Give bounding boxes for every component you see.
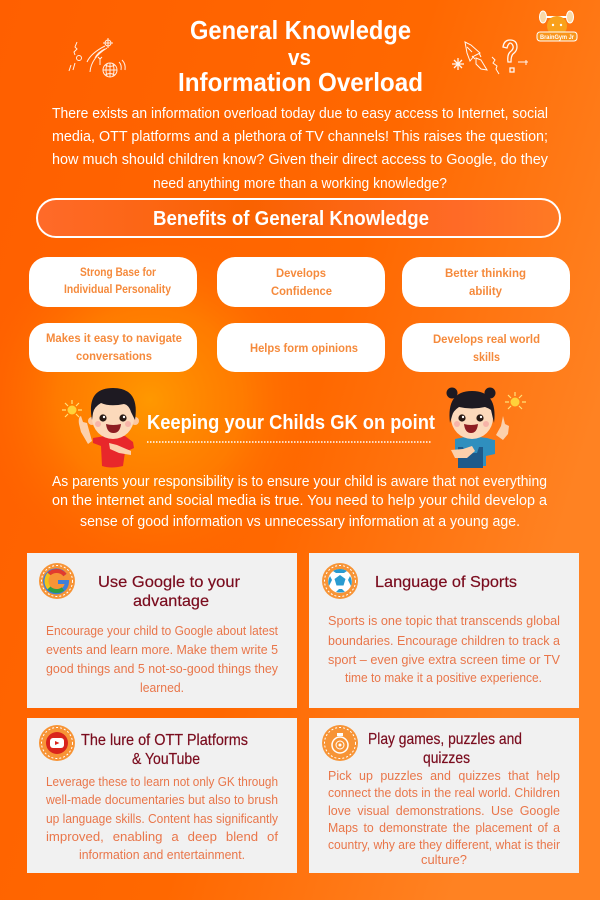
panel: OTT platforms: information and entertainment. xyxy=(79,848,245,862)
panel: use google: events and learn more. Make them write 5 xyxy=(46,643,278,657)
panel: use google xyxy=(27,553,297,708)
icon: google xyxy=(39,563,75,599)
panel: use google: Use Google to your xyxy=(98,574,241,591)
icon: football xyxy=(322,563,358,599)
benefit: better thinking xyxy=(402,257,570,307)
banner: benefits heading: Benefits of General Knowledge xyxy=(153,208,429,230)
icon: rocket and question mark doodle xyxy=(452,40,528,74)
panel: OTT platforms: well-made documentaries but also to brush xyxy=(45,793,278,807)
intro text: media, OTT platforms and a plethora of TV channels! This raises the question; xyxy=(52,129,548,145)
panel: use google: good things and 5 not-so-good things they xyxy=(46,662,279,676)
parents paragraph: sense of good information vs unnecessary information at a young age. xyxy=(80,514,520,530)
intro text: There exists an information overload today due to easy access to Internet, social xyxy=(52,106,548,122)
panel: games and puzzles: love visual demonstrations. Use Google xyxy=(328,804,560,818)
benefit: conversations xyxy=(29,323,197,372)
benefit: opinions: Helps form opinions xyxy=(250,341,358,355)
icon: comet and globe doodle xyxy=(69,38,125,77)
intro text: need anything more than a working knowledge? xyxy=(153,176,447,192)
panel: games and puzzles xyxy=(309,718,579,873)
panel: language of sports: Language of Sports xyxy=(375,574,517,591)
panel: games and puzzles: connect the dots in the real world. Children xyxy=(328,786,560,800)
panel: language of sports: sport – even give extra screen time or TV xyxy=(328,653,561,667)
benefit: opinions xyxy=(217,323,385,372)
panel: OTT platforms: & YouTube xyxy=(132,751,200,768)
panel: games and puzzles: Play games, puzzles and xyxy=(368,731,522,748)
parents paragraph: As parents your responsibility is to ensure your child is aware that not everything xyxy=(52,474,547,490)
heading: keeping GK on point: Keeping your Childs GK on point xyxy=(147,412,435,434)
panel: games and puzzles: Maps to demonstrate the placement of a xyxy=(328,821,560,835)
panel: games and puzzles: Pick up puzzles and quizzes that help xyxy=(328,769,560,783)
panel: OTT platforms: up language skills. Content has significantly xyxy=(46,812,279,826)
panel: games and puzzles: culture? xyxy=(421,853,467,867)
panel: use google: Encourage your child to Google about latest xyxy=(46,624,278,638)
panel: OTT platforms xyxy=(27,718,297,873)
icon: girl with bulb xyxy=(446,388,526,468)
banner: benefits heading xyxy=(37,199,560,237)
panel: benefit pills xyxy=(29,257,570,372)
panel: language of sports: time to make it a positive experience. xyxy=(345,671,542,685)
panel: language of sports: boundaries. Encourage children to track a xyxy=(328,634,560,648)
intro text xyxy=(52,106,549,192)
intro text: how much should children know? Given their direct access to Google, do they xyxy=(52,152,549,168)
panel: use google: learned. xyxy=(140,681,184,695)
benefit: real world skills: Develops real world xyxy=(433,332,540,346)
benefit: better thinking: Better thinking xyxy=(445,266,526,280)
benefit: conversations: conversations xyxy=(76,349,152,363)
benefit: strong base: Individual Personality xyxy=(64,282,171,296)
panel: OTT platforms: Leverage these to learn not only GK through xyxy=(46,775,278,789)
icon: boy with bulb xyxy=(62,388,139,468)
benefit: real world skills xyxy=(402,323,570,372)
title: Information Overload xyxy=(178,67,423,97)
benefit: strong base: Strong Base for xyxy=(80,265,156,279)
logo: BrainGym Jr xyxy=(537,11,577,41)
panel: OTT platforms: The lure of OTT Platforms xyxy=(81,732,248,749)
parents paragraph: on the internet and social media is true. You need to help your child develop a xyxy=(52,493,548,509)
logo: BrainGym Jr: BrainGym Jr xyxy=(540,34,574,41)
title: General Knowledge xyxy=(190,15,411,45)
title xyxy=(178,15,423,97)
benefit: better thinking: ability xyxy=(469,284,502,298)
benefit: confidence: Confidence xyxy=(271,284,332,298)
panel: language of sports xyxy=(309,553,579,708)
benefit: strong base xyxy=(29,257,197,307)
icon: youtube xyxy=(39,725,75,761)
benefit: confidence: Develops xyxy=(276,266,326,280)
title: vs xyxy=(288,45,311,70)
panel: OTT platforms: improved, enabling a deep blend of xyxy=(46,830,279,844)
panel: language of sports: Sports is one topic that transcends global xyxy=(328,614,560,628)
panel: use google: advantage xyxy=(133,593,209,610)
benefit: confidence xyxy=(217,257,385,307)
icon: stopwatch xyxy=(322,725,358,761)
benefit: conversations: Makes it easy to navigate xyxy=(46,331,182,345)
panel: games and puzzles: quizzes xyxy=(423,750,470,767)
parents paragraph xyxy=(52,474,548,530)
benefit: real world skills: skills xyxy=(473,350,500,364)
panel: games and puzzles: country, why are they different, what is their xyxy=(328,838,560,852)
